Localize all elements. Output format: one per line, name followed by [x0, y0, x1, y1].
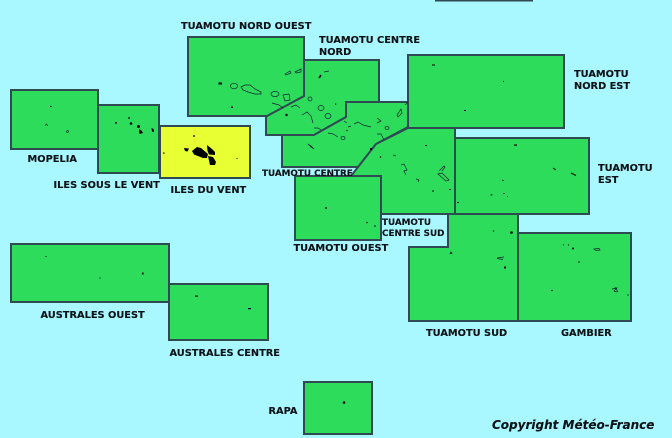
label: Rapa: RAPA: [268, 406, 298, 417]
label: Tuamotu Nord Est: NORD EST: [574, 81, 630, 92]
zone: Rapa: [304, 382, 372, 434]
label: Iles du Vent: ILES DU VENT: [170, 185, 247, 196]
islands: Tuamotu Ouest: [325, 207, 376, 226]
islands: Australes and Rapa: [46, 256, 345, 404]
islands: Iles du Vent: [163, 135, 237, 165]
zone: Tuamotu Nord Ouest: [188, 37, 304, 116]
islands: Tuamotu Centre: [308, 102, 408, 150]
islands: Gambier: [551, 244, 629, 296]
zone: Tuamotu Est: [455, 138, 589, 214]
label: Australes Centre: AUSTRALES CENTRE: [170, 348, 280, 359]
islands: Iles Sous le Vent: [115, 118, 154, 134]
zone: Australes Centre: [169, 284, 268, 340]
islands: Tuamotu Sud: [450, 231, 513, 269]
islands: Tuamotu Nord Ouest and Centre Nord: [218, 69, 336, 130]
zone: Iles du Vent: [160, 126, 250, 178]
label: Tuamotu Nord Ouest: TUAMOTU NORD OUEST: [181, 21, 312, 32]
label: Tuamotu Centre Nord: TUAMOTU CENTRE: [319, 35, 420, 46]
label: Australes Ouest: AUSTRALES OUEST: [40, 310, 145, 321]
zone: Tuamotu Ouest: [295, 176, 381, 240]
zone: Mopelia: [11, 90, 98, 149]
islands: Mopelia: [45, 106, 68, 132]
zone: Gambier: [518, 233, 631, 321]
label: Tuamotu Ouest: TUAMOTU OUEST: [294, 243, 389, 254]
zone: Tuamotu Sud: [409, 214, 518, 321]
label: Tuamotu Est: EST: [598, 175, 619, 186]
label: Tuamotu Centre Sud: TUAMOTU: [382, 218, 431, 228]
islands: Tuamotu Nord Est: [432, 64, 504, 111]
islands: Tuamotu Centre Sud: [380, 145, 451, 192]
zone: Australes Ouest: [11, 244, 169, 302]
zone: Iles Sous le Vent: [98, 105, 159, 173]
copyright: Copyright Météo-France: [492, 418, 654, 432]
top edge fragment: [435, 0, 533, 2]
zone: Tuamotu Centre Sud: [351, 128, 455, 214]
label: Tuamotu Centre Nord: NORD: [319, 47, 351, 58]
zone: Tuamotu Centre Nord: [266, 60, 379, 135]
islands: Tuamotu Est: [457, 144, 576, 203]
label: Tuamotu Est: TUAMOTU: [598, 163, 653, 174]
zone: Tuamotu Centre: [282, 102, 408, 167]
zone: Tuamotu Nord Est: [408, 55, 564, 128]
label: Gambier: GAMBIER: [561, 328, 612, 339]
label: Tuamotu Sud: TUAMOTU SUD: [426, 328, 507, 339]
label: Tuamotu Centre: TUAMOTU CENTRE: [262, 169, 353, 179]
label: Mopelia: MOPELIA: [28, 154, 77, 165]
label: Tuamotu Nord Est: TUAMOTU: [574, 69, 629, 80]
label: Iles Sous le Vent: ILES SOUS LE VENT: [54, 180, 160, 191]
label: Tuamotu Centre Sud: CENTRE SUD: [382, 229, 444, 239]
